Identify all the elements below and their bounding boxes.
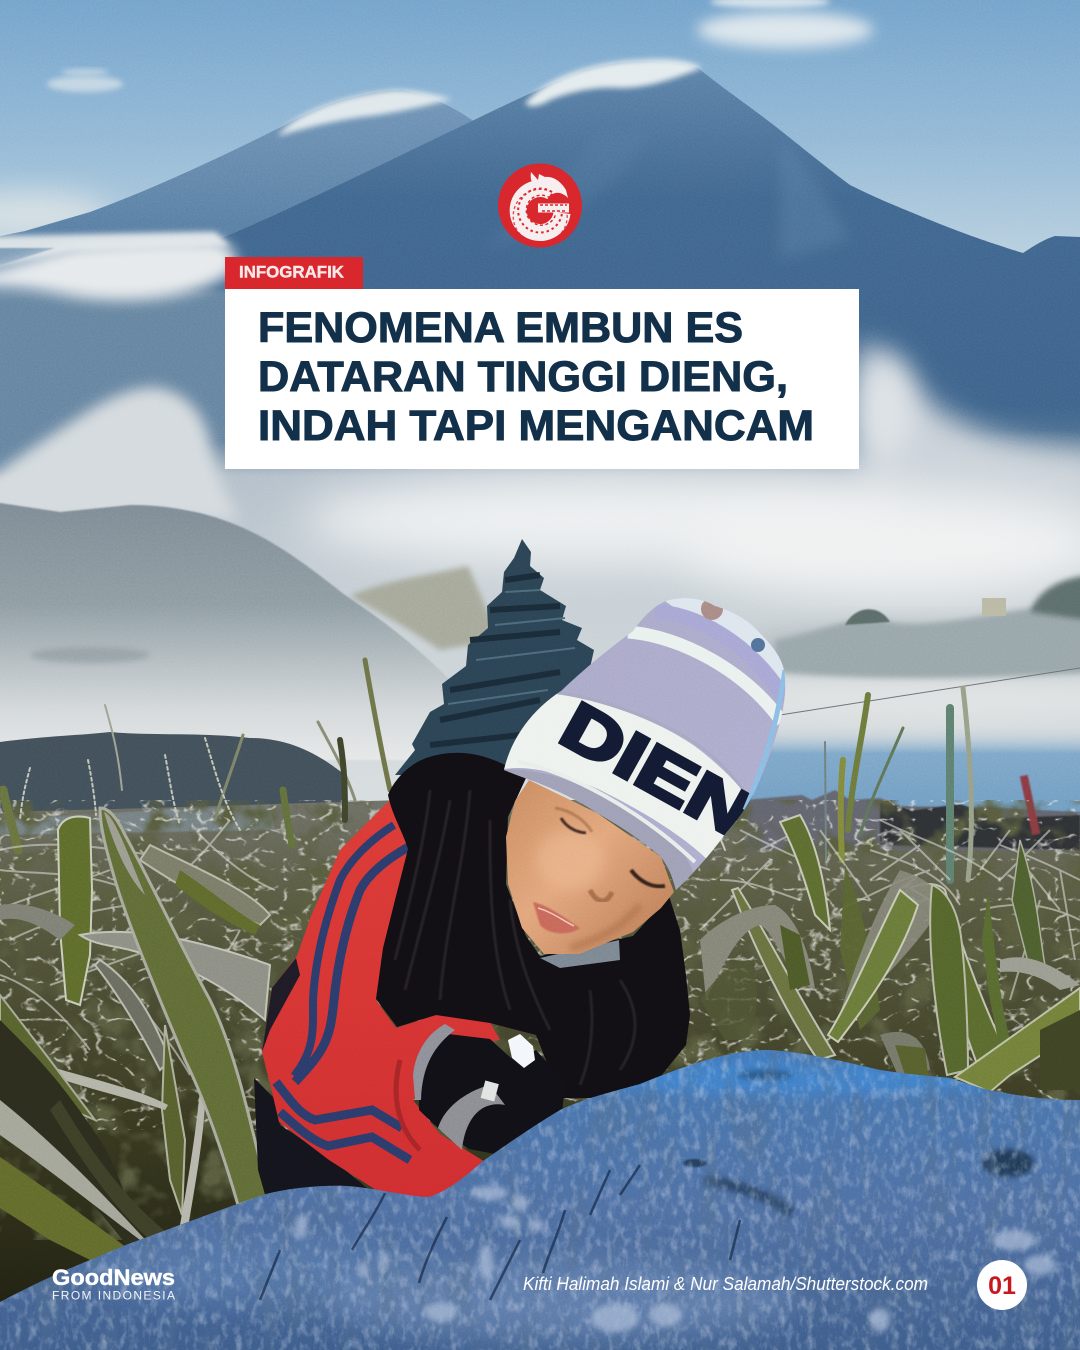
brand logotype (52, 1265, 175, 1302)
hat: lower band (504, 770, 694, 890)
brand logotype: FROM INDONESIA (52, 1288, 175, 1302)
person: trousers (254, 1078, 380, 1205)
hat: DIEN band (504, 693, 750, 858)
big frosted foreground blade (100, 808, 268, 1205)
lower yellow-green blade (0, 1157, 130, 1265)
snow (508, 1034, 535, 1068)
photo credit: Kifti Halimah Islami & Nur Salamah/Shutterstock.com (523, 1274, 928, 1294)
grass blades: left (0, 808, 270, 1265)
person: knit hat (504, 598, 786, 890)
frosted mesh (0, 820, 1080, 1075)
left hazy hill (0, 500, 460, 760)
frost vein texture (0, 800, 1080, 1240)
logo badge (498, 164, 582, 248)
hat: top white and lilac stripes (666, 598, 786, 686)
title panel: FENOMENA EMBUN ES (258, 304, 743, 352)
mountain: small left peak (0, 90, 480, 300)
right hazy hills (775, 575, 1080, 715)
frosted arching blade (80, 932, 270, 1020)
frosted blue rock (0, 1040, 1080, 1350)
title panel: INDAH TAPI MENGANCAM (258, 402, 814, 450)
category tag: INFOGRAFIK (239, 264, 344, 282)
page number badge (977, 1260, 1027, 1310)
mountain: main volcano (0, 59, 1080, 520)
title panel (225, 289, 859, 469)
distant buildings (0, 775, 1080, 850)
page number badge: 01 (988, 1272, 1016, 1300)
temple (395, 539, 594, 775)
misty valley (0, 430, 1080, 815)
distant grass spikes (3, 660, 971, 880)
person: face (506, 780, 674, 954)
frost ground (0, 800, 1080, 1350)
high clouds (0, 0, 873, 237)
grass blades: right (700, 815, 1080, 1092)
green upright blade (58, 816, 92, 1005)
title panel: DATARAN TINGGI DIENG, (258, 353, 788, 401)
left dark hills (0, 732, 350, 830)
rock frost patches (295, 1186, 1056, 1332)
person: jacket (262, 800, 500, 1210)
person: collar (540, 940, 620, 968)
hair highlights (395, 790, 635, 1085)
sky (0, 0, 1080, 345)
category tag (225, 257, 363, 289)
blue distance band (740, 725, 1080, 820)
person: hair (376, 753, 690, 1098)
frosted rear blade (140, 845, 270, 925)
olive distant hill (350, 566, 500, 650)
hat: DIEN lettering: DIEN (549, 688, 764, 852)
valley clouds (300, 472, 1080, 724)
brand logotype: GoodNews (52, 1265, 175, 1290)
person: gloved hand (413, 1024, 565, 1157)
low clouds and ridges (0, 232, 1080, 530)
